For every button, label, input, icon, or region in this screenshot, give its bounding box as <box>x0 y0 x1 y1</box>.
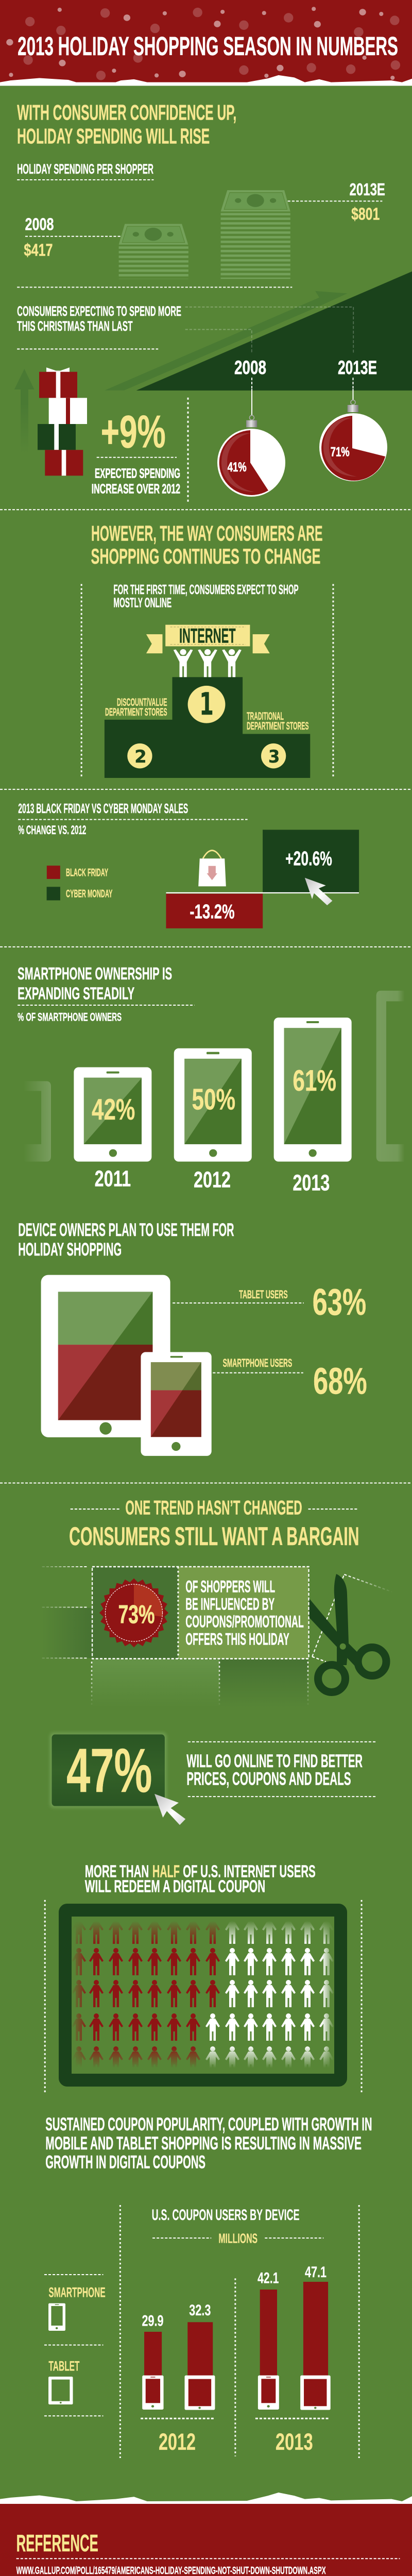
podium: 2 <box>134 746 147 767</box>
device: 2011 42%: 42% <box>92 1093 135 1126</box>
podium: 3 <box>268 746 280 767</box>
bar: black friday -13.2% <box>166 894 263 928</box>
heading: more than half <box>85 1861 316 1896</box>
bar: cyber monday +20.6% <box>263 830 359 892</box>
badge: 73% <box>99 1578 168 1648</box>
chart unit: millions: MILLIONS <box>218 2231 258 2246</box>
subheading: percent of owners: % OF SMARTPHONE OWNERS <box>18 1011 122 1024</box>
coupon panel right <box>178 1567 308 1659</box>
bar: 2013 tablet 47.1: 47.1 <box>305 2263 327 2280</box>
heading: however <box>91 521 323 569</box>
subheading: spending per shopper: HOLIDAY SPENDING PER SHOPPER <box>17 162 153 177</box>
label: discount value department stores: DISCOUNT/VALUE <box>117 697 167 708</box>
podium: 1 <box>199 687 214 722</box>
heading: more than half: WILL REDEEM A DIGITAL COUPON <box>85 1876 265 1896</box>
icon: shopping bag <box>198 851 226 886</box>
subheading: percent change: % CHANGE VS. 2012 <box>18 823 86 837</box>
stat: +9%: +9% <box>101 405 166 457</box>
ornament: 2008 41% <box>217 378 285 497</box>
header band <box>0 0 412 86</box>
year label: 2008 ornament: 2008 <box>234 357 266 378</box>
coupon text: OF SHOPPERS WILL <box>185 1578 275 1596</box>
arrow: rising trend <box>105 291 347 391</box>
icon: large money stack <box>221 190 290 279</box>
subheading: consumers expecting to spend more: THIS CHRISTMAS THAN LAST <box>17 319 133 334</box>
section: references <box>0 2493 412 2576</box>
heading: one trend: ONE TREND HASN’T CHANGED <box>125 1497 302 1519</box>
section: spending <box>0 0 412 391</box>
bar: black friday -13.2%: -13.2% <box>190 901 235 923</box>
legend: CYBER MONDAY <box>66 888 113 900</box>
legend: smartphone <box>48 2285 106 2331</box>
label: traditional department stores <box>247 710 308 732</box>
stat: tablet users 63%: 63% <box>313 1282 366 1323</box>
device: 2011 42% <box>74 1067 151 1162</box>
text: sustained coupon popularity: GROWTH IN DIGITAL COUPONS <box>45 2153 205 2173</box>
text: first time online: MOSTLY ONLINE <box>113 596 171 611</box>
heading: consumer confidence: WITH CONSUMER CONFIDENCE UP, <box>17 101 236 125</box>
dark green rising wedge <box>136 272 412 391</box>
label: 2008 spending: $417 <box>24 240 53 260</box>
bar: 2013 smartphone 42.1 <box>258 2269 279 2410</box>
year label: 2013E ornament: 2013E <box>338 357 377 378</box>
legend <box>47 866 113 900</box>
bar: 2013 tablet 47.1 <box>300 2263 331 2410</box>
stat: tablet users 63%: TABLET USERS <box>239 1289 288 1301</box>
label: 2013E spending: 2013E <box>350 179 385 199</box>
ornament: 2013E 71% <box>319 378 387 481</box>
bar: 2012 tablet 32.3 <box>185 2301 215 2410</box>
bar: 2012 tablet 32.3: 32.3 <box>189 2301 211 2318</box>
heading: device owners: HOLIDAY SHOPPING <box>18 1240 122 1260</box>
ornament: 2013E 71%: 71% <box>331 445 350 460</box>
device: big tablet <box>41 1275 170 1437</box>
badge: 73%: 73% <box>118 1600 154 1629</box>
chart: people pictogram <box>65 1910 341 2080</box>
bar: 2012 smartphone 29.9: 29.9 <box>142 2312 164 2329</box>
year labels: 2011 <box>95 1166 131 1191</box>
stat: smartphone users 68%: 68% <box>313 1361 367 1402</box>
section: changing shopping <box>0 521 412 928</box>
caption: expected spending increase: INCREASE OVER 2012 <box>92 482 180 496</box>
text: sustained coupon popularity <box>45 2114 372 2173</box>
coupon text: COUPONS/PROMOTIONAL <box>185 1613 304 1631</box>
heading: smartphone ownership: SMARTPHONE OWNERSHIP IS <box>18 963 172 983</box>
year labels: 2013 <box>293 1170 330 1195</box>
bar: cyber monday +20.6%: +20.6% <box>285 848 332 870</box>
bar: 2013 smartphone 42.1: 42.1 <box>258 2269 279 2286</box>
axis label: 2012: 2012 <box>159 2429 196 2455</box>
heading: more than half: HALF <box>152 1861 180 1881</box>
bar: 2012 smartphone 29.9 <box>142 2312 164 2410</box>
banner: internet: INTERNET <box>179 624 236 648</box>
label: discount value department stores <box>105 697 167 718</box>
coupon panel left <box>93 1567 178 1659</box>
arrow: faint up arrow <box>14 369 35 453</box>
text: go online <box>186 1752 363 1789</box>
section: coupon users by device <box>44 2205 359 2458</box>
heading: smartphone ownership: EXPANDING STEADILY <box>18 984 134 1003</box>
heading: smartphone ownership <box>18 963 172 1003</box>
subheading: black friday vs cyber monday: 2013 BLACK FRIDAY VS CYBER MONDAY SALES <box>18 802 188 816</box>
heading: device owners <box>18 1220 234 1260</box>
icon: three people lifting banner <box>174 649 242 677</box>
year labels <box>95 1166 330 1195</box>
label: 2008 spending: 2008 <box>25 214 54 234</box>
ornament: 2008 41%: 41% <box>228 460 247 474</box>
label: 2008 spending <box>24 214 121 260</box>
device: 2012 50% <box>174 1048 252 1162</box>
label: 2013E spending <box>288 179 385 224</box>
stat: smartphone users 68% <box>213 1357 367 1402</box>
icon: cursor <box>305 878 332 905</box>
coupon text <box>185 1578 304 1649</box>
cut line behind scissors <box>312 1574 393 1662</box>
caption: expected spending increase <box>92 467 180 496</box>
label: traditional department stores: DEPARTMENT STORES <box>247 720 308 732</box>
label: traditional department stores: TRADITIONAL <box>247 710 284 722</box>
heading: consumer confidence <box>17 101 236 148</box>
legend: tablet <box>48 2359 80 2404</box>
connector lines to ornaments <box>185 307 353 353</box>
legend: tablet: TABLET <box>48 2359 80 2374</box>
snow edge <box>0 2493 412 2505</box>
faint device right <box>376 991 405 1162</box>
heading: more than half: MORE THAN <box>85 1861 149 1881</box>
subheading: consumers expecting to spend more: CONSUMERS EXPECTING TO SPEND MORE <box>17 304 181 319</box>
label: discount value department stores: DEPARTMENT STORES <box>105 706 167 718</box>
heading: consumer confidence: HOLIDAY SPENDING WILL RISE <box>17 124 210 148</box>
reference panel <box>0 2504 412 2576</box>
stat: tablet users 63% <box>173 1282 366 1323</box>
subheading: consumers expecting to spend more <box>17 304 181 334</box>
section: digital coupons <box>45 1861 372 2173</box>
device: 2013 61% <box>274 1018 352 1162</box>
icon: scissors <box>310 1574 386 1692</box>
legend: BLACK FRIDAY <box>66 866 108 879</box>
caption: expected spending increase: EXPECTED SPENDING <box>95 467 180 481</box>
coupon text: BE INFLUENCED BY <box>185 1596 274 1614</box>
section: bargain <box>0 1483 412 1707</box>
stat: smartphone users 68%: SMARTPHONE USERS <box>223 1357 292 1369</box>
banner: internet <box>146 624 269 653</box>
faint device left <box>24 1081 51 1162</box>
callout: 47% button: 47% <box>66 1736 152 1805</box>
section: smartphones <box>0 947 412 1456</box>
coupon surroundings <box>42 1567 308 1707</box>
axis label: 2013: 2013 <box>276 2429 313 2455</box>
heading: more than half: OF U.S. INTERNET USERS <box>183 1861 316 1881</box>
icon: gift stack <box>38 367 87 476</box>
heading: reference: REFERENCE <box>16 2531 98 2556</box>
label: 2013E spending: $801 <box>351 204 380 224</box>
icon: cursor on button <box>154 1794 185 1825</box>
device: 2013 61%: 61% <box>293 1064 336 1097</box>
device: 2012 50%: 50% <box>192 1083 235 1116</box>
icon: small money stack <box>119 224 188 279</box>
text: first time online <box>113 583 299 611</box>
device: small smartphone <box>141 1352 212 1456</box>
heading: device owners: DEVICE OWNERS PLAN TO USE THEM FOR <box>18 1220 234 1240</box>
coupon text: OFFERS THIS HOLIDAY <box>185 1631 289 1649</box>
year labels: 2012 <box>194 1167 231 1192</box>
podium <box>105 677 310 778</box>
legend: smartphone: SMARTPHONE <box>48 2285 106 2300</box>
